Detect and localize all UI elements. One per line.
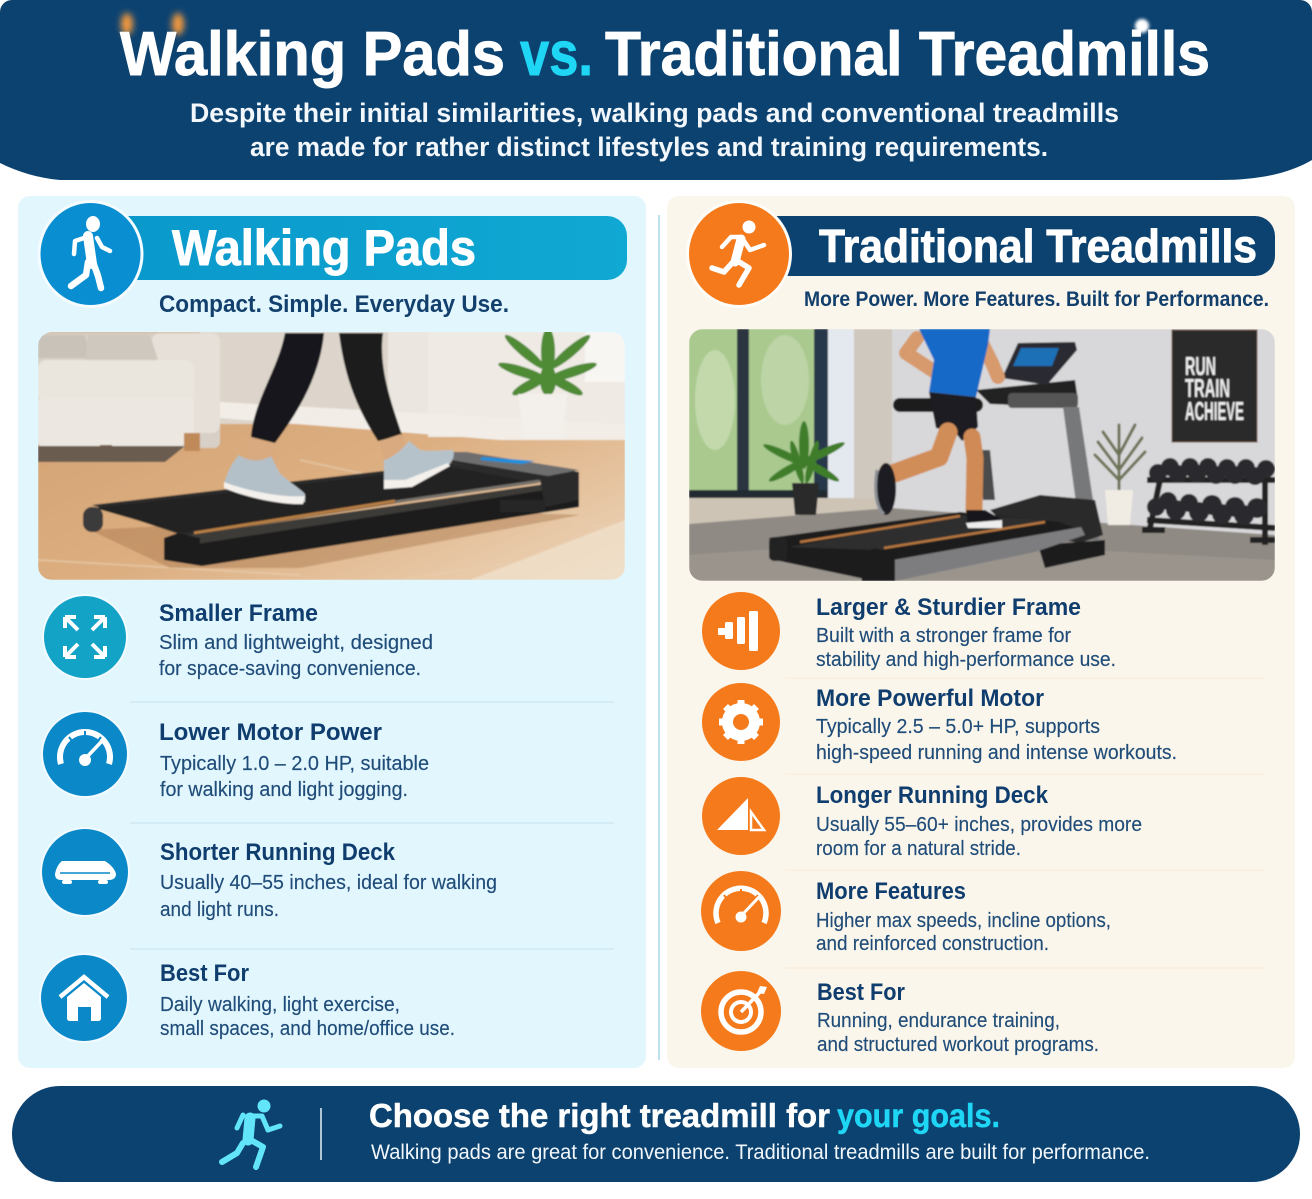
header banner xyxy=(0,0,1312,180)
footer headline: your goals. xyxy=(837,1097,1000,1134)
title: Walking Pads xyxy=(120,20,505,89)
feature: more features: Higher max speeds, incline options, xyxy=(816,909,1111,932)
title xyxy=(120,20,1210,89)
feature: more powerful motor: More Powerful Motor xyxy=(816,685,1044,712)
feature: lower motor power: Lower Motor Power xyxy=(159,719,382,746)
treadmill xyxy=(976,380,1078,407)
traditional treadmills tagline: More Power. More Features. Built for Performance. xyxy=(804,288,1269,311)
feature: smaller frame xyxy=(42,594,433,680)
footer banner xyxy=(12,1086,1300,1182)
feature: best for: Running, endurance training, xyxy=(817,1009,1060,1032)
shadows and treadmill xyxy=(90,510,580,568)
icon: deck xyxy=(40,827,130,917)
feature: smaller frame: Slim and lightweight, designed xyxy=(159,631,433,654)
icon: speedometer xyxy=(701,871,781,951)
feature: shorter running deck: and light runs. xyxy=(160,898,279,921)
feature: lower motor power xyxy=(41,710,429,801)
feature: best for: Best For xyxy=(160,960,249,987)
poster xyxy=(1172,330,1257,442)
footer headline: Choose the right treadmill for xyxy=(369,1097,830,1134)
feature: larger and sturdier frame xyxy=(702,592,1116,671)
feature: longer running deck: room for a natural stride. xyxy=(816,837,1021,860)
poster: ACHIEVE xyxy=(1185,396,1244,426)
panel: traditional treadmills xyxy=(667,196,1295,1068)
icon: expand arrows xyxy=(42,594,128,680)
feature: more powerful motor xyxy=(702,683,1177,764)
small plant xyxy=(1095,425,1145,490)
feature: more powerful motor: high-speed running and intense workouts. xyxy=(816,741,1177,764)
icon: gauge xyxy=(41,710,129,798)
title: vs. xyxy=(520,20,593,89)
legs xyxy=(251,333,324,443)
floor xyxy=(689,508,1275,561)
feature: smaller frame: Smaller Frame xyxy=(159,600,318,627)
left plant xyxy=(762,421,846,484)
feature: smaller frame: for space-saving convenience. xyxy=(159,657,421,680)
title: Traditional Treadmills xyxy=(605,20,1210,89)
poster: TRAIN xyxy=(1185,373,1230,403)
feature: shorter running deck: Usually 40–55 inches, ideal for walking xyxy=(160,871,497,894)
feature: best for xyxy=(39,953,455,1043)
feature: larger and sturdier frame: stability and high-performance use. xyxy=(816,648,1116,671)
feature: best for: Daily walking, light exercise, xyxy=(160,993,400,1016)
icon: cyan runner xyxy=(222,1100,280,1167)
feature: shorter running deck xyxy=(40,827,497,921)
icon: target xyxy=(701,971,781,1051)
icon: bars xyxy=(702,592,780,670)
traditional treadmills heading banner: Traditional Treadmills xyxy=(819,220,1257,272)
runner xyxy=(906,338,935,372)
icon: gear xyxy=(702,683,780,761)
photo: walking pad in living room xyxy=(38,328,628,580)
icon: incline xyxy=(702,777,780,855)
footer text: Walking pads are great for convenience. Traditional treadmills are built for performance. xyxy=(371,1141,1150,1164)
window xyxy=(689,329,816,492)
walking pads tagline: Compact. Simple. Everyday Use. xyxy=(159,291,509,318)
console xyxy=(1002,342,1077,385)
feature: longer running deck: Longer Running Deck xyxy=(816,782,1049,809)
subtitle xyxy=(190,98,1119,162)
feature: larger and sturdier frame: Built with a stronger frame for xyxy=(816,624,1071,647)
feature: best for: and structured workout programs. xyxy=(817,1033,1099,1056)
icon: walking person xyxy=(38,200,144,308)
plant xyxy=(498,332,598,396)
subtitle: Despite their initial similarities, walking pads and conventional treadmills xyxy=(190,98,1119,128)
poster: RUN xyxy=(1185,351,1216,381)
subtitle: are made for rather distinct lifestyles and training requirements. xyxy=(250,132,1048,162)
feature: longer running deck xyxy=(702,777,1142,860)
feature: more features: and reinforced construction. xyxy=(816,932,1049,955)
icon: running person xyxy=(686,200,792,308)
shoes xyxy=(224,455,305,502)
sofa xyxy=(38,333,220,448)
icon: house xyxy=(39,953,129,1043)
walking pads heading banner: Walking Pads xyxy=(172,220,476,276)
walking pads heading banner xyxy=(120,216,627,280)
feature: more features xyxy=(701,871,1111,955)
feature: lower motor power: Typically 1.0 – 2.0 HP, suitable xyxy=(160,752,429,775)
feature: lower motor power: for walking and light jogging. xyxy=(160,778,408,801)
feature: more powerful motor: Typically 2.5 – 5.0+ HP, supports xyxy=(816,715,1100,738)
photo: runner on treadmill xyxy=(689,329,1275,581)
feature: shorter running deck: Shorter Running Deck xyxy=(160,839,396,866)
dumbbell rack xyxy=(1142,458,1275,545)
feature: larger and sturdier frame: Larger & Sturdier Frame xyxy=(816,594,1081,621)
panel: walking pads xyxy=(18,196,646,1068)
feature: more features: More Features xyxy=(816,878,966,905)
feature: best for: Best For xyxy=(817,979,905,1006)
feature: best for xyxy=(701,971,1099,1056)
feature: longer running deck: Usually 55–60+ inches, provides more xyxy=(816,813,1142,836)
feature: best for: small spaces, and home/office use. xyxy=(160,1017,455,1040)
